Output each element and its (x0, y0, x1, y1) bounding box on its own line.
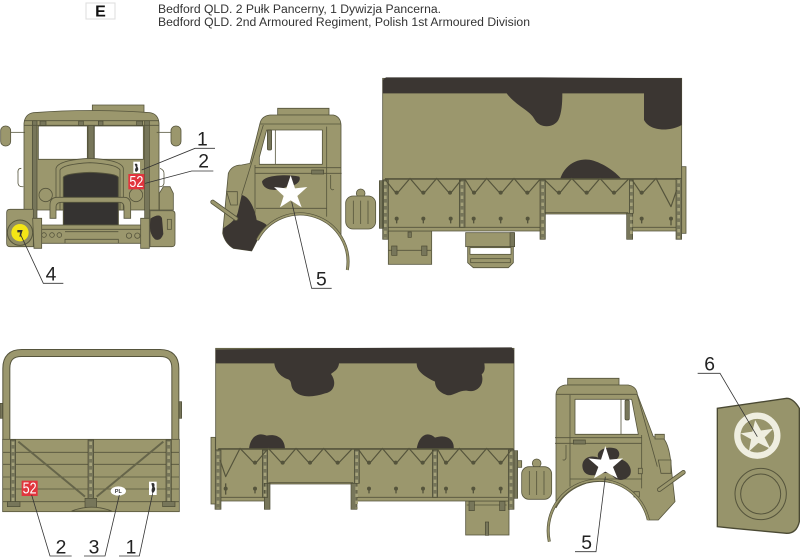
callout 5 (575, 477, 605, 554)
title: two-line caption: Bedford QLD. 2nd Armoured Regiment, Polish 1st Armoured Division (158, 17, 530, 29)
stowage box (466, 501, 509, 535)
marking: white plate 1 (133, 162, 140, 173)
marking: white plate 1 (149, 482, 157, 495)
grille (63, 172, 118, 225)
marking: red plate 52: 52 (23, 481, 37, 498)
cargo side panels (211, 437, 522, 509)
title: two-line caption: Bedford QLD. 2 Pułk Pancerny, 1 Dywizja Pancerna. (158, 4, 441, 16)
callout 6 (698, 354, 757, 437)
marking: red plate 52: 52 (129, 174, 143, 191)
callout 4 (20, 233, 63, 286)
panel: door with star insignia (717, 398, 799, 533)
panel: right-side cab and door detail (522, 354, 799, 554)
icon: right mirror (157, 126, 181, 146)
icon: spare tank (346, 189, 376, 229)
panel: rear view of truck (0, 353, 182, 557)
marking: PL oval: PL (115, 489, 122, 495)
icon: yellow tactical sign (7, 220, 33, 245)
tilt hoop (0, 353, 182, 440)
icon: white star (588, 446, 623, 478)
callout 2 (145, 152, 213, 183)
marking: PL oval (111, 486, 126, 496)
wheel arch (548, 480, 648, 542)
panel: left-side cargo bed (379, 77, 686, 268)
step ladder (466, 233, 515, 268)
wheel arch (257, 214, 348, 270)
panel: right-side cargo bed (211, 347, 522, 535)
title: two-line caption (158, 4, 530, 29)
camouflage patch (582, 448, 631, 480)
icon: bumper arm (659, 472, 683, 490)
cargo side panels (379, 167, 686, 239)
header: variant badge E (86, 3, 115, 20)
callout 1 (142, 130, 215, 170)
stowage box (388, 231, 432, 264)
icon: spare tank (522, 459, 552, 499)
icon: bumper arm (213, 202, 236, 219)
callout 4: 4 (46, 265, 57, 286)
callout 5: 5 (581, 533, 592, 554)
icon: white star (274, 175, 307, 207)
tailgate (3, 439, 179, 512)
camouflage patch (262, 175, 300, 190)
panel: left-side cab (213, 108, 376, 291)
canvas tilt (383, 77, 682, 180)
header: variant badge E: E (95, 4, 106, 20)
callout 3 (84, 495, 119, 557)
icon: left mirror (1, 126, 25, 146)
callout 1: 1 (197, 130, 208, 151)
panel: front view of truck (1, 105, 215, 286)
callout 2: 2 (198, 152, 209, 173)
callout 5: 5 (316, 270, 327, 291)
callout 6: 6 (704, 354, 715, 375)
callout 5 (292, 202, 332, 291)
bumper and fenders (7, 209, 175, 248)
canvas tilt (216, 347, 514, 450)
callout 2 (32, 495, 72, 557)
callout 1 (119, 493, 153, 557)
